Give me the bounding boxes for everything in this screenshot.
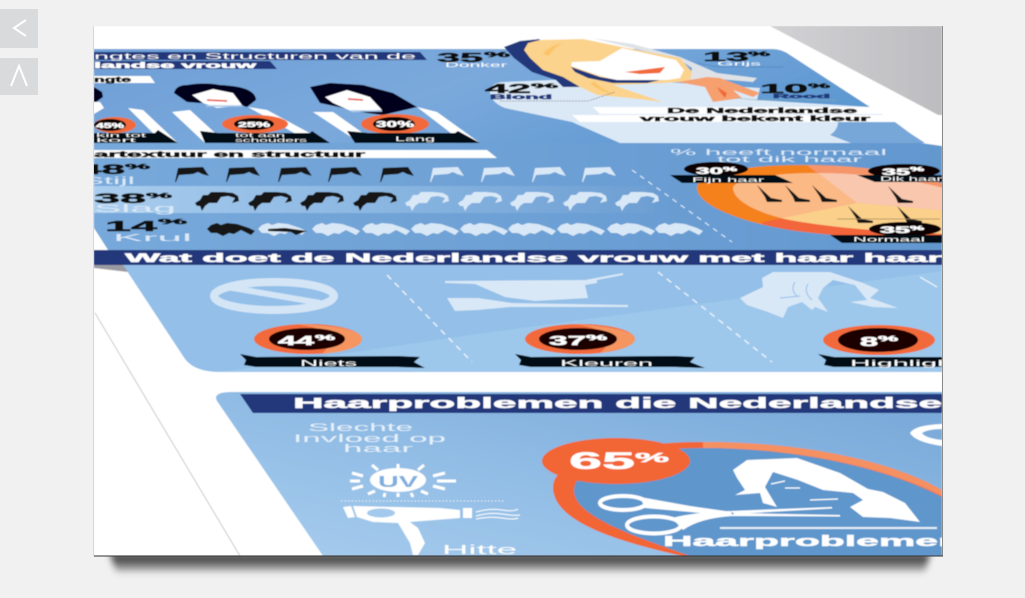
row: krul xyxy=(105,218,703,244)
icon: UV sun xyxy=(350,464,456,497)
stat: rood: Rood xyxy=(773,94,830,100)
heading band: what women do with their hair: Wat doet de Nederlandse vrouw met haar haar xyxy=(125,251,943,265)
heading line 1 xyxy=(94,52,427,61)
label: dik haar xyxy=(857,164,942,183)
stat: donker xyxy=(436,51,511,68)
chart: haarproblemen badge xyxy=(542,438,963,556)
row: slag xyxy=(94,190,659,215)
stat: grijs: Grijs xyxy=(717,62,763,68)
hair strand icons xyxy=(757,185,922,223)
figure: short hair xyxy=(94,87,178,144)
sub heading lengths xyxy=(94,76,155,84)
stat: donker: % xyxy=(484,52,513,59)
stat: donker: 35 xyxy=(437,50,483,65)
label: fijn haar: 30 xyxy=(696,166,723,176)
label: normaal xyxy=(830,222,942,244)
row: stijl: Stijl xyxy=(82,176,135,187)
row: krul: 14 xyxy=(105,218,159,235)
heading band: hair problems xyxy=(240,394,942,413)
stat: highlights xyxy=(818,324,942,368)
frame drop shadow xyxy=(110,554,930,572)
up button xyxy=(0,58,38,95)
label: dik haar: Dik haar xyxy=(880,177,942,183)
icon: hair dryer xyxy=(343,506,520,555)
white corner xyxy=(895,122,942,145)
heading: hair colour confession: De Nederlandse xyxy=(667,108,857,115)
heading line 1: ngtes en Structuren van de xyxy=(94,52,418,61)
icon: woman with hair xyxy=(733,458,920,522)
icon: partial head at right xyxy=(910,424,942,446)
heading line 2: landse vrouw xyxy=(94,61,258,70)
shaded notch xyxy=(830,122,923,143)
stat: blond: Blond xyxy=(490,95,553,101)
icon: prohibition sign xyxy=(214,282,334,310)
label: hitte: Hitte xyxy=(442,542,517,557)
stat: niets: % xyxy=(315,335,337,342)
icon: UV sun: UV xyxy=(378,474,419,491)
figure: shoulder length hair: schouders xyxy=(235,138,309,144)
text: bad influence: Slechte xyxy=(308,422,413,434)
figure: short hair: 45% xyxy=(96,123,126,130)
figure: short hair: kin tot xyxy=(96,133,148,139)
stat: highlights: % xyxy=(878,336,900,343)
row: slag: % xyxy=(146,193,175,200)
figure: shoulder length hair: tot aan xyxy=(235,133,286,139)
panel: hair colour and length xyxy=(94,38,942,145)
stat: blond: % xyxy=(531,84,561,90)
stat: rood: % xyxy=(808,84,833,90)
stat: grijs: 13 xyxy=(703,49,749,64)
label: dik haar: % xyxy=(910,167,926,173)
stat: highlights: 8 xyxy=(860,334,878,349)
text: bad influence: haar xyxy=(343,443,414,455)
sub heading lengths: ngte xyxy=(94,77,131,84)
heading: texture: artextuur en structuur xyxy=(94,150,365,159)
heading line 2 xyxy=(94,61,277,70)
label: fijn haar: % xyxy=(723,167,739,173)
figure: shoulder length hair: 25% xyxy=(238,122,272,129)
stat: kleuren: 37 xyxy=(549,333,586,348)
stat: blond xyxy=(485,81,615,101)
stat: niets: 44 xyxy=(278,333,316,348)
frame edges xyxy=(94,26,943,556)
row: slag: 38 xyxy=(94,190,147,206)
row: stijl: 48 xyxy=(78,161,126,177)
figure: long hair: Lang xyxy=(395,137,435,143)
heading: hair thickness: tot dik haar xyxy=(717,155,863,164)
stat bubble 65: 65 xyxy=(569,448,635,475)
label: haarproblemen: Haarproblemen xyxy=(663,533,963,550)
label: normaal: 35 xyxy=(880,225,910,235)
figure: shoulder length hair xyxy=(172,84,330,144)
panel: hair problems xyxy=(216,392,963,557)
row: stijl: % xyxy=(125,164,153,171)
stat: niets xyxy=(240,324,425,368)
heading: texture xyxy=(94,150,497,159)
stat bubble 65 xyxy=(542,438,690,484)
text: bad influence: Invloed op xyxy=(293,433,446,445)
figure: long hair xyxy=(310,83,480,143)
infographic photo frame xyxy=(78,26,975,557)
figure: short hair: kort xyxy=(96,138,139,144)
stat: kleuren xyxy=(515,324,705,368)
chart: hair thickness pie xyxy=(670,162,942,244)
text: bad influence xyxy=(293,422,446,455)
stat: rood xyxy=(735,81,837,100)
label: fijn haar xyxy=(670,162,793,184)
stat: grijs xyxy=(697,49,783,68)
label: normaal: % xyxy=(910,226,926,232)
row: slag: Slag xyxy=(94,203,176,215)
icon: scissors xyxy=(600,496,840,534)
panel: treatments xyxy=(94,265,975,372)
heading band: what women do with their hair xyxy=(94,250,943,265)
label: dik haar: 35 xyxy=(882,167,910,177)
pale pedestal xyxy=(490,78,923,143)
stat: grijs: % xyxy=(748,52,773,58)
illustration: blonde woman xyxy=(504,38,760,102)
row: krul: % xyxy=(158,219,191,226)
figure: long hair: 30% xyxy=(376,120,414,129)
label: fijn haar: Fijn haar xyxy=(692,178,764,184)
stat: niets: Niets xyxy=(300,359,357,368)
stat: kleuren: Kleuren xyxy=(560,359,653,368)
heading: hair thickness xyxy=(670,148,888,164)
heading band: hair problems: Haarproblemen die Nederlandse xyxy=(293,395,942,412)
paper fold line xyxy=(95,313,240,556)
heading: hair thickness: % heeft normaal xyxy=(670,148,888,157)
icon: woman with highlights xyxy=(740,272,898,318)
heading: hair colour confession xyxy=(572,107,942,123)
stat: rood: 10 xyxy=(760,81,808,96)
stat bubble 65: % xyxy=(635,450,670,465)
stat: kleuren: % xyxy=(586,335,610,342)
label: normaal: Normaal xyxy=(853,238,925,244)
row: krul: Krul xyxy=(113,233,192,244)
stat: donker: Donker xyxy=(445,63,507,69)
heading: hair colour confession: vrouw bekent kleur xyxy=(640,116,871,123)
panel: hair texture and structure xyxy=(78,143,960,250)
row: stijl xyxy=(94,163,616,186)
stat: blond: 42 xyxy=(485,81,531,96)
icon: dye bowl and brush xyxy=(445,273,628,311)
stat: highlights: Highlights xyxy=(850,359,975,368)
back button xyxy=(0,9,38,48)
gray background corner xyxy=(770,26,942,117)
